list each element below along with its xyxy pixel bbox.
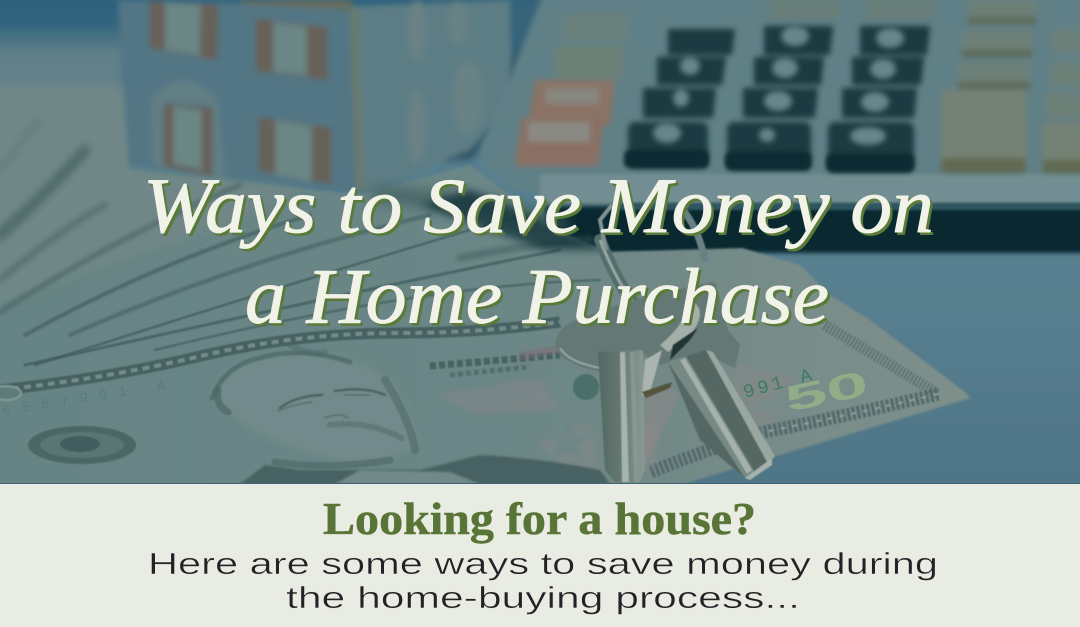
- title: [143, 162, 936, 342]
- note edge streaks: [0, 120, 600, 365]
- note star: [554, 432, 590, 460]
- title line 1 shadow: Ways to Save Money on: [146, 164, 936, 252]
- key blade left: [598, 350, 645, 482]
- title line 2 shadow: a Home Purchase: [248, 255, 832, 342]
- photo tint overlay: [0, 0, 1080, 484]
- house windows: [150, 0, 484, 185]
- title line 2: a Home Purchase: [245, 252, 829, 340]
- note lower green seal: [573, 374, 599, 400]
- note border: [0, 322, 938, 472]
- title line 1: Ways to Save Money on: [143, 162, 934, 249]
- note serial number: 6567991 A: [1, 378, 167, 420]
- note seal: [28, 426, 136, 464]
- key teeth: [644, 388, 680, 460]
- intro text: [148, 546, 938, 615]
- photo: fanned bank notes: [0, 85, 970, 494]
- portrait: [212, 345, 610, 484]
- note serial number right: 991 A: [741, 364, 815, 404]
- calculator red and pale keys: [515, 14, 628, 166]
- note lettering band: [430, 346, 560, 378]
- intro text line 1: Here are some ways to save money during: [148, 546, 938, 581]
- intro heading: Looking for a house?: [323, 494, 756, 544]
- photo: calculator: [481, 0, 1080, 253]
- calculator black keys: [628, 26, 930, 172]
- key blade right: [668, 350, 772, 478]
- panel: photo background: [0, 0, 1080, 494]
- backdrop: blue table and wall: [0, 0, 1080, 485]
- calculator key legends: [653, 26, 904, 145]
- panel: intro band: [0, 483, 1080, 627]
- key bow: [556, 282, 740, 372]
- note denomination: 50: [781, 362, 872, 420]
- note pink printing: [444, 368, 788, 469]
- photo: toy house: [118, 0, 512, 195]
- icon: house keys: [556, 205, 775, 482]
- key ring: [600, 205, 705, 310]
- intro text line 2: the home-buying process...: [286, 580, 800, 615]
- calculator tan keys: [770, 0, 1080, 173]
